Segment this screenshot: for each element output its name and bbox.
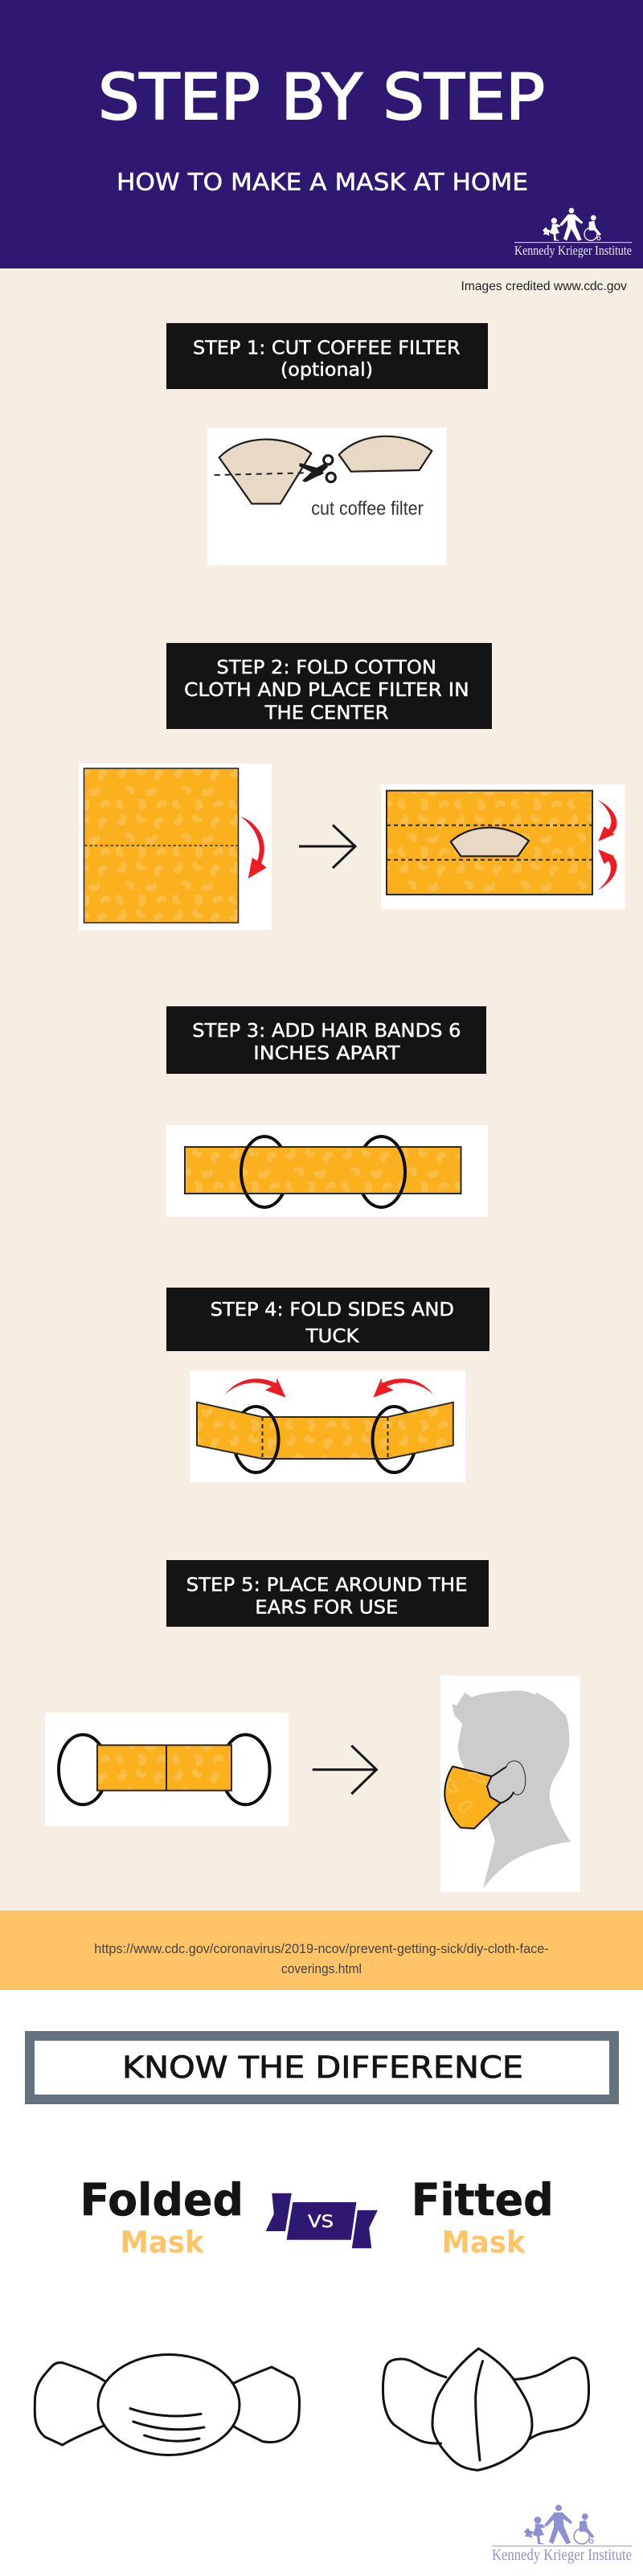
folded mask label: Mask [121,2225,205,2260]
folded mask label: Folded [80,2174,244,2226]
source link banner: https://www.cdc.gov/coronavirus/2019-ncov/prevent-getting-sick/diy-cloth-face- [94,1942,549,1956]
step 5 heading [166,1560,489,1627]
logo: Kennedy Krieger Institute, lavender [492,2504,632,2564]
icon: scissors [299,456,335,482]
know the difference heading [30,2036,614,2099]
icon: fitted mask [383,2349,589,2470]
step 2 heading: THE CENTER [264,701,389,723]
comparison section background [0,1990,643,2576]
source link banner: coverings.html [281,1962,362,1976]
vs ribbon [266,2193,378,2248]
vs ribbon: VS [308,2212,334,2231]
step 4 heading: TUCK [305,1325,359,1347]
caption: cut coffee filter [311,498,424,519]
source link banner [0,1910,643,1990]
step 5 heading: EARS FOR USE [255,1596,398,1619]
fitted mask label [412,2174,554,2260]
red arrows [597,800,617,842]
step 4 heading [166,1288,489,1351]
fitted mask label: Mask [442,2225,526,2260]
step 2 illustration: folded cloth with filter [381,784,625,909]
step 4 heading: STEP 4: FOLD SIDES AND [211,1298,454,1321]
arrow [299,825,355,868]
step 2 heading [166,643,492,729]
step 1 illustration: cut coffee filter [207,428,447,565]
header banner [0,0,643,268]
step 5 illustration: finished mask [45,1713,289,1826]
logo: Kennedy Krieger Institute, white [514,208,632,258]
step 3 heading [166,1006,486,1074]
icon: folded mask [35,2355,300,2455]
fitted mask label: Fitted [412,2174,554,2226]
step 3 heading: INCHES APART [253,1042,400,1064]
red arrows [225,1378,286,1398]
filter [451,828,529,856]
image credit: Images credited www.cdc.gov [461,280,627,293]
step 2 heading: STEP 2: FOLD COTTON [216,656,436,678]
know the difference heading: KNOW THE DIFFERENCE [122,2050,523,2085]
ear band and ear [492,1767,514,1803]
arrow [313,1746,376,1794]
head silhouette [452,1690,571,1889]
coffee filter with cut line [219,440,311,504]
folded mask label [80,2174,244,2260]
step 1 heading: (optional) [281,358,373,381]
step 5 illustration: head wearing mask [440,1676,580,1892]
red arrow [241,817,267,878]
cut piece of filter [339,436,432,472]
step 4 illustration: fold sides and tuck [190,1370,465,1482]
step 1 heading [166,323,488,389]
step 2 illustration: square cloth with fold line [79,764,272,930]
title: STEP BY STEP [98,62,545,134]
step 1 heading: STEP 1: CUT COFFEE FILTER [193,336,460,358]
subtitle: HOW TO MAKE A MASK AT HOME [117,169,528,196]
step 3 heading: STEP 3: ADD HAIR BANDS 6 [192,1019,461,1042]
step 5 heading: STEP 5: PLACE AROUND THE [186,1573,468,1595]
step 3 illustration: cloth strip with hair bands [166,1125,488,1217]
page background: steps section [0,0,643,1910]
mask on face [444,1767,501,1829]
step 2 heading: CLOTH AND PLACE FILTER IN [184,678,469,701]
